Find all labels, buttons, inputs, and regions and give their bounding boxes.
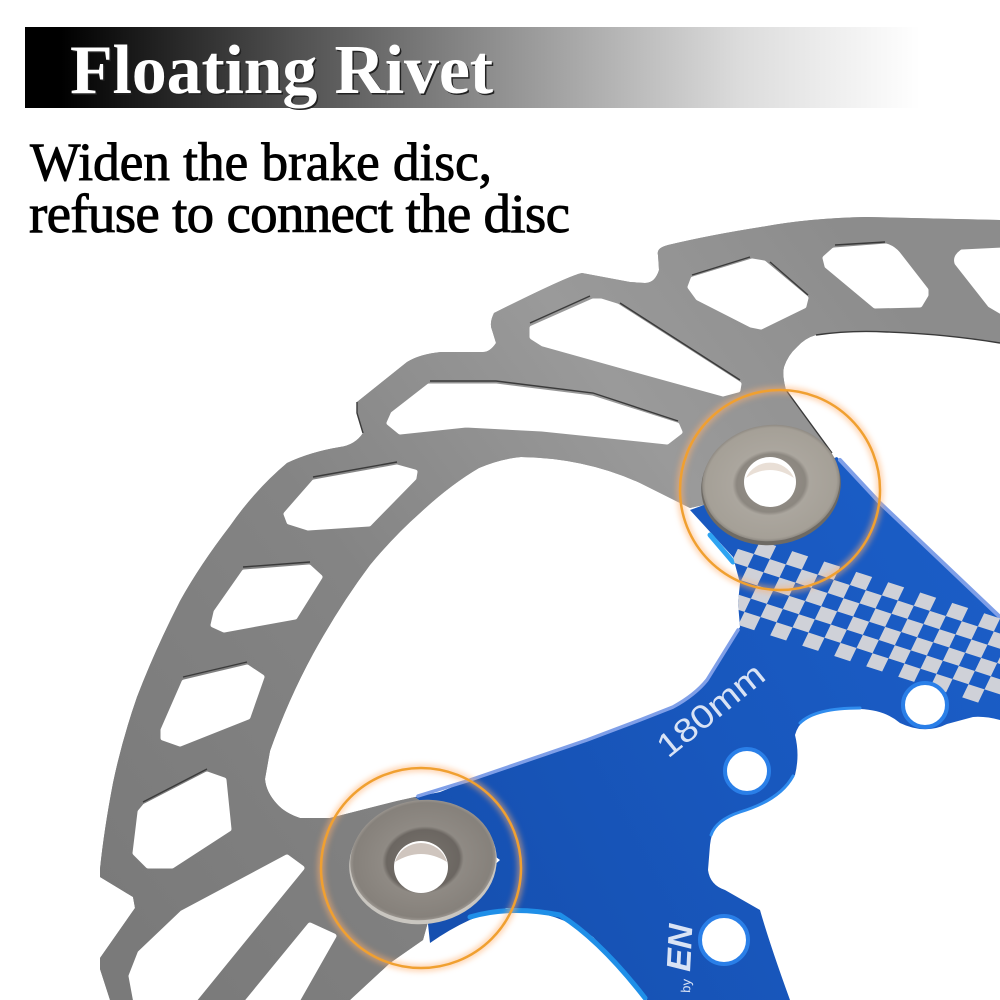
- brand logo: EN: [660, 922, 701, 972]
- mounting holes: [700, 683, 947, 964]
- brake disc rotor: [100, 217, 1000, 1000]
- header banner: [25, 27, 920, 110]
- rivet washer: [693, 418, 849, 554]
- rotor body: [100, 217, 1000, 1000]
- subtitle text: [29, 132, 570, 244]
- highlight circle: lower rivet: [321, 768, 521, 968]
- upper rivet: [693, 416, 849, 554]
- brand logo: [660, 922, 701, 993]
- rivet hole: [744, 457, 796, 507]
- size label: 180mm: [649, 655, 772, 764]
- slot edge shadows: [143, 242, 1000, 802]
- subtitle text: Widen the brake disc,: [30, 132, 492, 192]
- rivet washer: [341, 792, 505, 934]
- blue carrier: [400, 440, 1000, 1000]
- checkered pattern: [734, 544, 1000, 703]
- title: Floating Rivet: [70, 32, 493, 109]
- carrier edge highlights: [418, 460, 1000, 998]
- rivet hole: [394, 841, 448, 893]
- carrier body: [400, 440, 1000, 1000]
- subtitle text: refuse to connect the disc: [29, 183, 570, 244]
- lower rivet: [341, 790, 505, 934]
- brand logo: by: [678, 978, 694, 993]
- title: Floating Rivet: [72, 34, 494, 110]
- rotor vent slots: [131, 246, 1000, 1000]
- highlight circle: upper rivet: [680, 390, 880, 590]
